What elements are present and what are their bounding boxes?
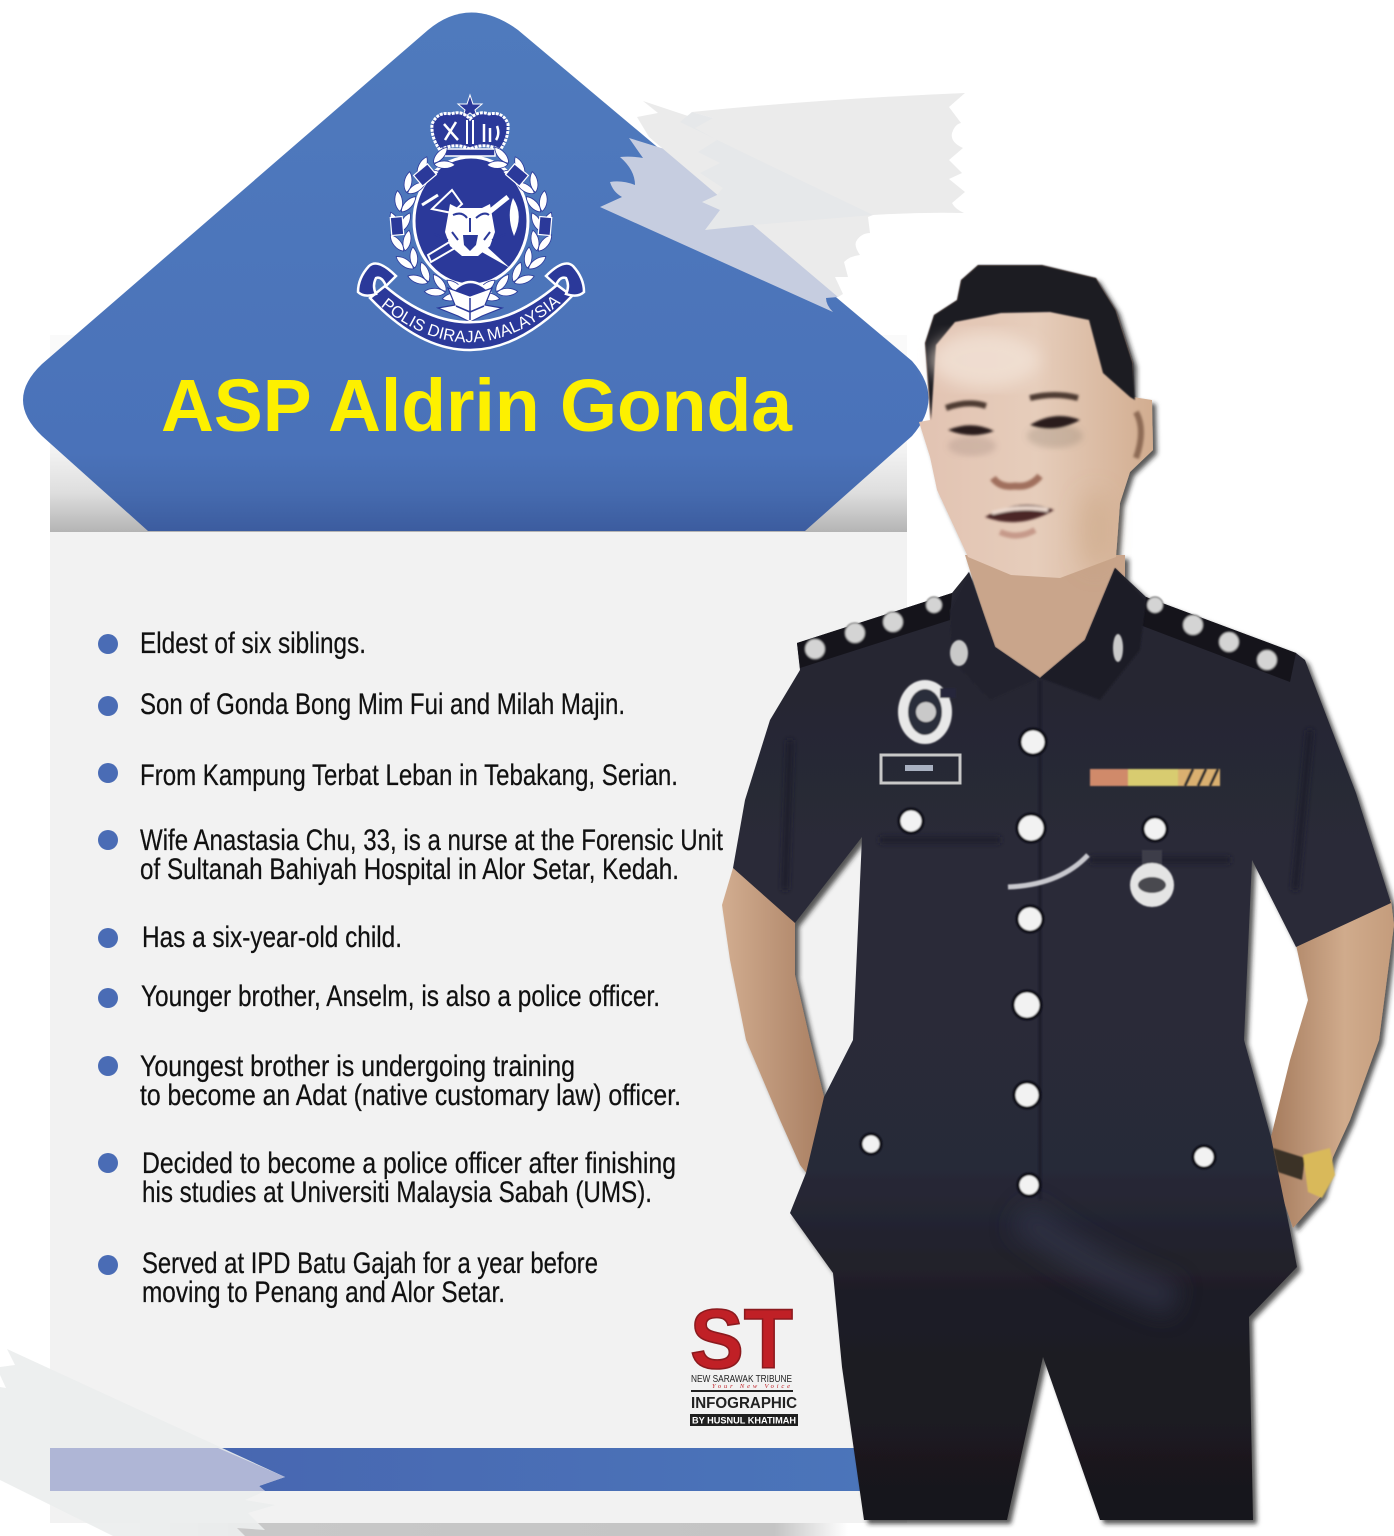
crest: tiger and daggers [422, 190, 519, 268]
logo: publication name: NEW SARAWAK TRIBUNE [691, 1373, 792, 1385]
title: ASP Aldrin Gonda [161, 364, 793, 447]
figure: medal ribbon [1090, 769, 1220, 786]
figure: head [919, 265, 1153, 578]
bullet: service [98, 1247, 598, 1309]
figure: name plate [881, 755, 960, 783]
crest: ribbon: POLIS DIRAJA MALAYSIA [382, 297, 561, 342]
figure: right arm [1271, 900, 1394, 1228]
torn tape: bottom left [0, 1349, 285, 1536]
figure: left arm [722, 868, 824, 1180]
bullet: wife [98, 824, 724, 886]
figure: silhouette [722, 265, 1394, 1520]
logo: tagline: Your New Voice [712, 1383, 790, 1390]
bullet: decision [98, 1147, 676, 1209]
figure: pocket medal [1130, 850, 1174, 907]
bullet list [98, 627, 724, 1309]
logo: ST letters: ST [690, 1292, 793, 1386]
figure: wristwatch [1273, 1148, 1335, 1198]
bullet: wife: of Sultanah Bahiyah Hospital in Alor Setar, Kedah. [140, 853, 679, 886]
bullet: youngest brother: Youngest brother is undergoing training [140, 1050, 575, 1083]
icon: police crest [356, 94, 586, 352]
figure: uniform [733, 568, 1391, 1520]
figure: face details [930, 332, 1141, 570]
bottom band [50, 1448, 865, 1491]
figure: neck [965, 555, 1125, 682]
logo: ST infographic [690, 1292, 798, 1426]
figure: badge [898, 680, 956, 744]
panel: blue header diamond [23, 12, 928, 531]
torn tape: top right [600, 93, 965, 312]
crest: crown [432, 113, 508, 156]
figure: whistle chain [1008, 855, 1088, 887]
bullet: child: Has a six-year-old child. [142, 921, 402, 954]
crest: wreath [387, 145, 555, 322]
figure: police officer [722, 265, 1394, 1520]
bullet: youngest brother: to become an Adat (native customary law) officer. [140, 1079, 681, 1112]
bullet: service: moving to Penang and Alor Setar. [142, 1276, 505, 1309]
figure: shoulder tabs [797, 593, 1296, 682]
bullet: youngest brother [98, 1050, 681, 1112]
bullet: wife: Wife Anastasia Chu, 33, is a nurse at the Forensic Unit [140, 824, 724, 857]
figure: hair [925, 265, 1135, 420]
bullet: decision: Decided to become a police officer after finishing [142, 1147, 676, 1180]
bullet: hometown: From Kampung Terbat Leban in Tebakang, Serian. [140, 759, 678, 792]
figure: collar [950, 568, 1146, 1200]
logo: infographic label: INFOGRAPHIC [691, 1395, 797, 1412]
logo: byline box: BY HUSNUL KHATIMAH [692, 1416, 796, 1426]
figure: collar pins [950, 634, 1123, 666]
crest: ribbon [356, 262, 586, 352]
bullet: younger brother: Younger brother, Anselm, is also a police officer. [141, 980, 660, 1013]
figure: buttons [861, 729, 1215, 1196]
bullet: service: Served at IPD Batu Gajah for a year before [142, 1247, 598, 1280]
crest: star [458, 95, 482, 119]
bullet: eldest: Eldest of six siblings. [140, 627, 366, 660]
bullet: parents: Son of Gonda Bong Mim Fui and Milah Majin. [140, 688, 625, 721]
figure: sleeve and fold shading [785, 730, 1310, 1300]
bullet: decision: his studies at Universiti Malaysia Sabah (UMS). [142, 1176, 652, 1209]
panel: background sheet [50, 335, 907, 1536]
